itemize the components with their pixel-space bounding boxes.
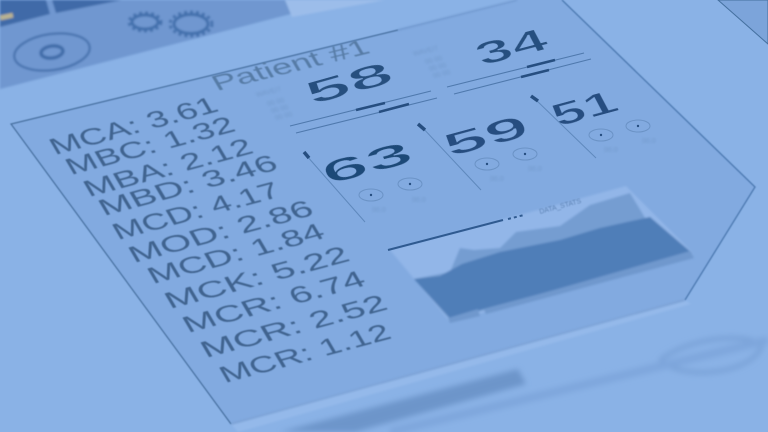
chart header bbox=[388, 198, 582, 250]
stat: 51: 51 bbox=[544, 84, 625, 134]
stat: 63 bbox=[304, 135, 426, 222]
measurement list: MCR: 6.74 bbox=[177, 267, 371, 338]
stat: 59: 59 bbox=[436, 109, 536, 164]
stat: 58: 00 00 bbox=[274, 111, 294, 122]
measurement list: MCD: 4.17 bbox=[107, 178, 285, 245]
stat: 34 bbox=[412, 22, 591, 94]
stat: 58: 00 00 bbox=[266, 97, 286, 108]
measurement list: MCR: 1.12 bbox=[214, 320, 396, 388]
title: Patient #1: Patient #1 bbox=[206, 35, 374, 95]
stat: 34: 00 00 bbox=[432, 69, 452, 80]
blurred foreground labels bbox=[280, 338, 768, 432]
stat: 58 bbox=[255, 55, 437, 133]
measurement list: MBD: 3.46 bbox=[93, 151, 283, 221]
measurement list: MCA: 3.61 bbox=[44, 93, 223, 160]
stat: 51 bbox=[531, 84, 656, 158]
stat: 51: 00.0 bbox=[604, 147, 618, 154]
stat: 63: 00.0 bbox=[372, 207, 386, 214]
measurement list: MCD: 1.84 bbox=[142, 219, 330, 289]
chart header: DATA_STATS bbox=[539, 198, 582, 216]
measurement list bbox=[44, 93, 396, 388]
stat: 59: 00.0 bbox=[490, 176, 504, 183]
icon: target circle bbox=[12, 29, 92, 75]
measurement list: MCR: 2.52 bbox=[195, 291, 393, 363]
stat: 51: 00.0 bbox=[642, 138, 656, 145]
measurement list: MBC: 1.32 bbox=[60, 112, 240, 180]
top-right corner panel bbox=[718, 0, 768, 44]
stat: 59: 00.0 bbox=[528, 166, 542, 173]
stat: 34: 00 00 bbox=[424, 55, 444, 66]
measurement list: MCK: 5.22 bbox=[159, 242, 355, 314]
stat: 34: 00 00 bbox=[428, 62, 448, 73]
measurement list: MBA: 2.12 bbox=[78, 134, 258, 202]
stat: 58: 58 bbox=[298, 55, 400, 112]
icon: gears bbox=[129, 12, 212, 36]
stat: 59 bbox=[418, 109, 542, 190]
stat: 58: 00 00 bbox=[270, 104, 290, 115]
measurement list: MOD: 2.86 bbox=[123, 196, 319, 268]
stat: 34: 34 bbox=[468, 22, 555, 73]
area chart bbox=[390, 186, 694, 323]
stat: 34: WAVE/7 bbox=[412, 45, 440, 58]
stat: 63: 63 bbox=[314, 135, 420, 192]
stat: 63: 00.0 bbox=[412, 197, 426, 204]
stat: 58: WAVE/7 bbox=[255, 86, 283, 99]
top dashboard strip bbox=[0, 0, 385, 89]
